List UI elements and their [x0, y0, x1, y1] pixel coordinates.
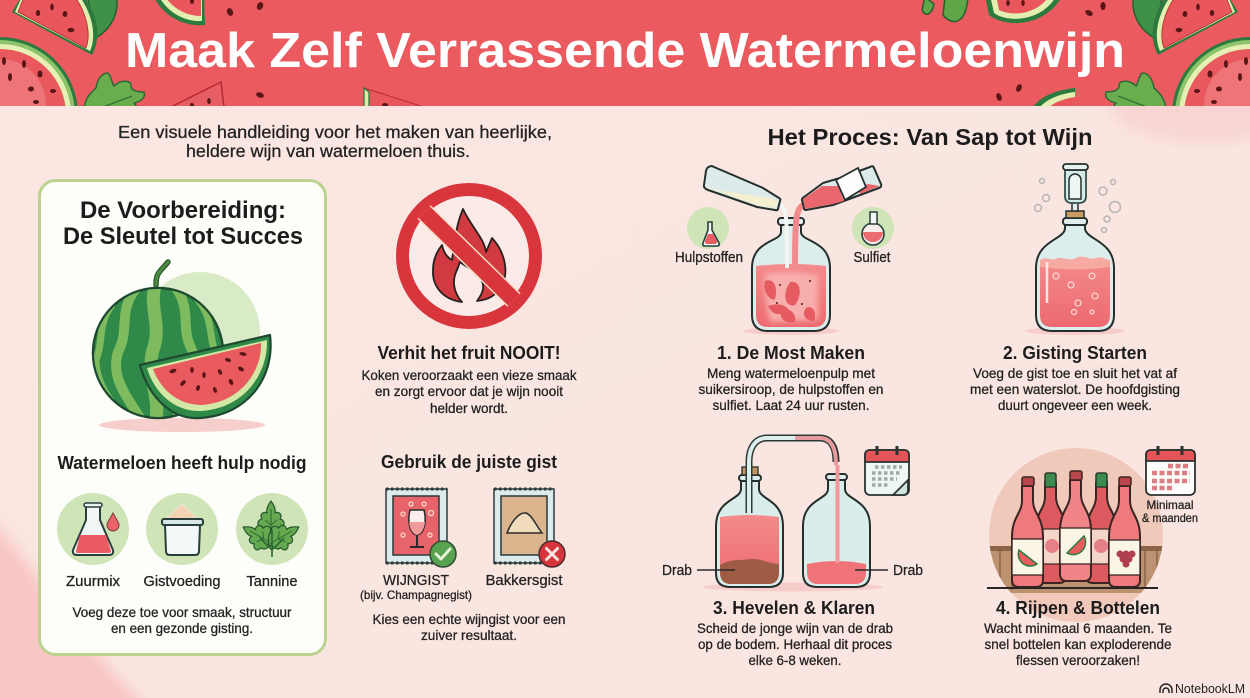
- step 1 text: Meng watermeloenpulp met: [707, 365, 875, 381]
- yeast labels: WIJNGIST: [383, 572, 449, 589]
- icon: baker's yeast packet: [494, 489, 565, 567]
- step 1 text: suikersiroop, de hulpstoffen en: [698, 381, 884, 397]
- warning text: en zorgt ervoor dat je wijn nooit: [375, 383, 563, 399]
- step 2 heading: 2. Gisting Starten: [1003, 342, 1147, 363]
- warning text: helder wordt.: [430, 400, 508, 416]
- step 4 text: flessen veroorzaken!: [1016, 652, 1140, 668]
- icon: Zuurmix flask: [57, 493, 129, 565]
- icon: calendar with months: [1146, 446, 1195, 495]
- icon: calendar: [865, 446, 909, 495]
- NotebookLM logo: NotebookLM: [1175, 682, 1245, 696]
- warning text: [362, 367, 577, 416]
- panel: De Voorbereiding: [40, 180, 326, 654]
- intro text: heldere wijn van watermeloen thuis.: [186, 141, 470, 161]
- panel heading: De Sleutel tot Succes: [63, 223, 303, 250]
- yeast labels: (bijv. Champagnegist): [360, 588, 472, 602]
- intro text: Een visuele handleiding voor het maken van heerlijke,: [118, 122, 552, 142]
- warning text: Koken veroorzaakt een vieze smaak: [362, 367, 577, 383]
- panel body text: Voeg deze toe voor smaak, structuur: [72, 604, 292, 620]
- warning heading: Verhit het fruit NOOIT!: [378, 342, 560, 363]
- icon: watermelon: [93, 262, 271, 432]
- step 2 text: met een waterslot. De hoofdgisting: [970, 381, 1180, 397]
- intro text: [118, 122, 552, 161]
- step 4 text: snel bottelen kan exploderende: [984, 636, 1172, 652]
- step 4 heading: 4. Rijpen & Bottelen: [996, 597, 1160, 618]
- step 2 text: Voeg de gist toe en sluit het vat af: [973, 365, 1177, 381]
- panel heading: [63, 197, 303, 250]
- step 4 text: [984, 620, 1172, 668]
- calendar label: [1142, 498, 1198, 525]
- label: Drab: [662, 563, 692, 579]
- step 1 heading: 1. De Most Maken: [717, 342, 865, 363]
- step 4 illustration: wine bottles: [985, 448, 1170, 622]
- step 1 text: [698, 365, 884, 413]
- icon: wine yeast packet: [386, 489, 456, 567]
- calendar label: Minimaal: [1146, 498, 1194, 512]
- step 1 text: sulfiet. Laat 24 uur rusten.: [712, 397, 870, 413]
- panel heading: De Voorbereiding:: [80, 197, 286, 224]
- step 3 text: [697, 620, 893, 668]
- step 2 illustration: airlock jar: [1025, 164, 1125, 335]
- label: Sulfiet: [854, 250, 890, 266]
- panel body text: en een gezonde gisting.: [111, 620, 253, 636]
- icon: Gistvoeding tub: [146, 493, 218, 565]
- step 3 text: elke 6-8 weken.: [748, 652, 842, 668]
- step 2 text: [970, 365, 1180, 413]
- step 3 illustration: racking jars: [697, 438, 888, 592]
- label: Zuurmix: [66, 574, 121, 590]
- step 3 text: op de bodem. Herhaal dit proces: [698, 636, 892, 652]
- title: Maak Zelf Verrassende Watermeloenwijn: [125, 24, 1125, 78]
- icon: no fire sign: [402, 190, 536, 322]
- yeast text: [372, 611, 566, 643]
- subheading: Watermeloen heeft hulp nodig: [58, 452, 306, 473]
- step 4 text: Wacht minimaal 6 maanden. Te: [984, 620, 1172, 636]
- process heading: Het Proces: Van Sap tot Wijn: [768, 124, 1092, 150]
- yeast heading: Gebruik de juiste gist: [381, 451, 557, 472]
- step 2 text: duurt ongeveer een week.: [998, 397, 1152, 413]
- step 3 text: Scheid de jonge wijn van de drab: [697, 620, 893, 636]
- panel body text: [72, 604, 292, 636]
- header banner with watermelons: [0, 0, 1250, 106]
- yeast text: Kies een echte wijngist voor een: [372, 611, 566, 627]
- calendar label: & maanden: [1142, 511, 1198, 525]
- step 1 illustration: mixing jar: [687, 166, 894, 335]
- label: Gistvoeding: [144, 574, 220, 590]
- yeast labels: [360, 572, 563, 602]
- label: Hulpstoffen: [675, 250, 743, 266]
- icon: Tannine leaves: [236, 493, 308, 565]
- label: Tannine: [246, 574, 298, 590]
- step 3 heading: 3. Hevelen & Klaren: [713, 597, 875, 618]
- label: Drab: [893, 563, 923, 579]
- yeast text: zuiver resultaat.: [421, 627, 517, 643]
- yeast labels: Bakkersgist: [486, 572, 563, 589]
